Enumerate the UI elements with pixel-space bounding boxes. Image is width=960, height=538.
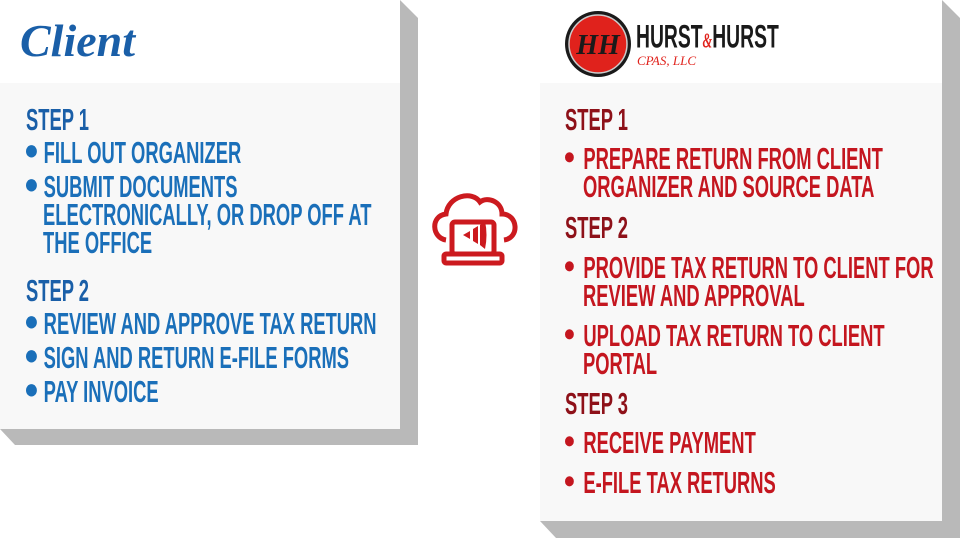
panel: client: ELECTRONICALLY, OR DROP OFF AT: [43, 198, 371, 232]
panel: hurst & hurst: REVIEW AND APPROVAL: [583, 279, 805, 313]
panel: client: THE OFFICE: [43, 226, 152, 260]
heading: Client: Client: [20, 15, 135, 66]
panel: hurst & hurst: RECEIVE PAYMENT: [583, 426, 756, 460]
panel: hurst & hurst: UPLOAD TAX RETURN TO CLIENT: [583, 319, 885, 353]
text: client step 2: STEP 2: [26, 274, 89, 308]
text: client step 1: STEP 1: [26, 103, 89, 137]
text: firm step 1: STEP 1: [565, 103, 628, 137]
logo: CPAS, LLC: [637, 53, 696, 68]
panel: client: SIGN AND RETURN E-FILE FORMS: [44, 341, 349, 375]
panel: hurst & hurst: [540, 0, 960, 538]
text: firm step 3: STEP 3: [565, 387, 628, 421]
panel: client: SUBMIT DOCUMENTS: [44, 170, 237, 204]
logo: HURST&HURST: [636, 19, 779, 55]
logo: [565, 11, 779, 77]
panel: client: PAY INVOICE: [44, 375, 159, 409]
icon: cloud laptop: [432, 193, 518, 266]
text: firm step 2: STEP 2: [565, 211, 628, 245]
panel: hurst & hurst: PORTAL: [583, 347, 657, 381]
panel: client: FILL OUT ORGANIZER: [44, 136, 241, 170]
panel: client: [0, 0, 418, 445]
panel: hurst & hurst: PREPARE RETURN FROM CLIENT: [583, 142, 883, 176]
panel: client: REVIEW AND APPROVE TAX RETURN: [44, 307, 377, 341]
logo: HH: [575, 30, 621, 61]
panel: hurst & hurst: ORGANIZER AND SOURCE DATA: [583, 170, 874, 204]
panel: hurst & hurst: PROVIDE TAX RETURN TO CLIENT FOR: [583, 251, 934, 285]
panel: hurst & hurst: E-FILE TAX RETURNS: [583, 466, 776, 500]
